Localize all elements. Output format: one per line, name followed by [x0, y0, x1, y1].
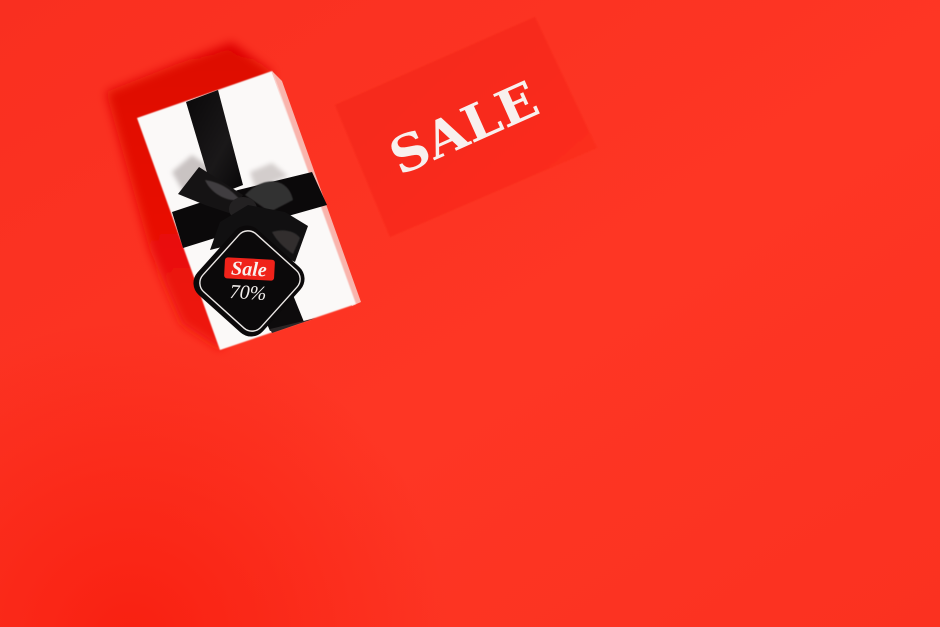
box lid [137, 71, 356, 350]
horizontal ribbon [172, 172, 327, 248]
lower ribbon below tag [262, 295, 304, 331]
tag inner outline [195, 226, 305, 336]
card text: SALE [381, 69, 547, 187]
bow knot [229, 197, 257, 221]
sale card [335, 17, 597, 237]
box side [272, 71, 361, 306]
ribbon shadow on lid [172, 155, 222, 198]
pill text: Sale [231, 258, 267, 281]
ribbon sheen [245, 181, 293, 212]
vertical ribbon [186, 90, 243, 196]
tag body [187, 219, 311, 343]
discount text: 70% [229, 281, 267, 305]
lower tail sheen [272, 230, 300, 254]
bow left highlight [205, 180, 240, 200]
price tag [187, 219, 311, 343]
bow left loop [178, 167, 243, 214]
bow lower tail [210, 205, 308, 262]
box shadow [106, 42, 272, 350]
card body [335, 17, 597, 237]
gift box [137, 71, 361, 350]
lower ribbon edge [270, 318, 316, 333]
